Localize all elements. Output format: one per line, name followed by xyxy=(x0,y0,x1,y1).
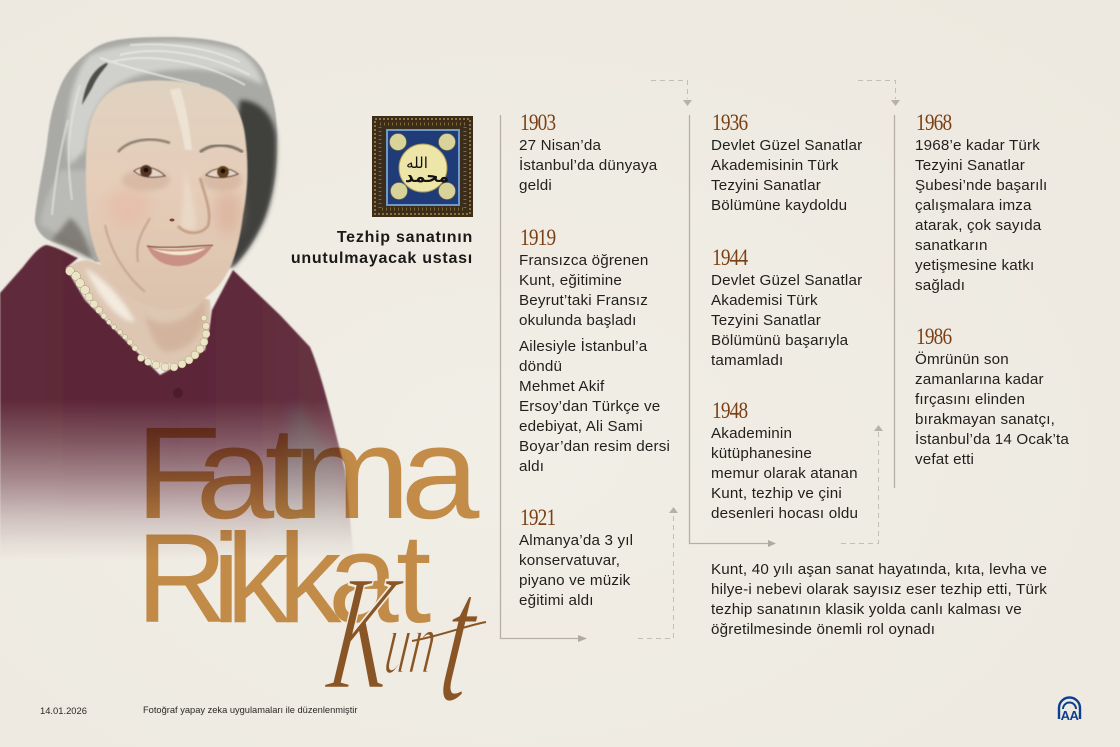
title: Kunt script: n xyxy=(404,593,443,693)
button xyxy=(173,388,183,398)
timeline 1921: 1921 xyxy=(520,505,555,530)
timeline 1944: Akademisi Türk xyxy=(711,292,818,309)
timeline 1986: fırçasını elinden xyxy=(915,391,1025,408)
timeline 1948: Kunt, tezhip ve çini xyxy=(711,485,842,502)
timeline 1944: Devlet Güzel Sanatlar xyxy=(711,272,862,289)
timeline 1986: vefat etti xyxy=(915,451,974,468)
title: Fatma Rikkat xyxy=(135,400,480,649)
sweater xyxy=(0,245,355,570)
timeline 1948: kütüphanesine xyxy=(711,445,812,462)
timeline 1968: çalışmalara imza xyxy=(915,197,1032,214)
hair xyxy=(35,37,277,268)
timeline 1944: 1944 xyxy=(712,245,747,270)
timeline 1919: Mehmet Akif xyxy=(519,378,604,395)
timeline 1968: Tezyini Sanatlar xyxy=(915,157,1025,174)
footer note: Fotoğraf yapay zeka uygulamaları ile düzenlenmiştir xyxy=(143,705,357,715)
timeline 1919: Kunt, eğitimine xyxy=(519,272,622,289)
calligraphy artwork: الله xyxy=(406,154,428,172)
eyebrows xyxy=(118,140,170,152)
timeline 1986: bırakmayan sanatçı, xyxy=(915,411,1055,428)
summary paragraph: tezhip sanatının klasik yolda canlı kalması ve xyxy=(711,601,1022,618)
calligraphy artwork: محمد xyxy=(405,167,449,187)
timeline 1919: edebiyat, Ali Sami xyxy=(519,418,643,435)
timeline 1921 xyxy=(519,505,633,609)
timeline 1903: İstanbul’da dünyaya xyxy=(519,157,657,174)
timeline 1936: Akademisinin Türk xyxy=(711,157,839,174)
timeline 1919: Fransızca öğrenen xyxy=(519,252,649,269)
timeline 1968: 1968’e kadar Türk xyxy=(915,137,1040,154)
timeline 1921: eğitimi aldı xyxy=(519,592,594,609)
timeline 1919: 1919 xyxy=(520,225,555,250)
timeline 1944: tamamladı xyxy=(711,352,783,369)
title: Kunt script: u xyxy=(379,593,418,693)
timeline 1986: Ömrünün son xyxy=(915,351,1009,368)
timeline 1968: sanatkarın xyxy=(915,237,988,254)
timeline 1968 xyxy=(915,110,1047,294)
face xyxy=(86,81,247,309)
timeline 1936 xyxy=(711,110,862,214)
nose xyxy=(178,178,209,233)
timeline 1919: Ailesiyle İstanbul’a xyxy=(519,338,647,355)
timeline 1986: İstanbul’da 14 Ocak’ta xyxy=(915,431,1069,448)
timeline 1986: zamanlarına kadar xyxy=(915,371,1044,388)
neck xyxy=(67,260,211,364)
summary paragraph: öğretilmesinde önemli rol oynadı xyxy=(711,621,935,638)
timeline 1944 xyxy=(711,245,862,369)
footer date: 14.01.2026 xyxy=(40,705,87,716)
timeline 1986 xyxy=(915,324,1069,468)
timeline 1968: 1968 xyxy=(916,110,951,135)
timeline 1936: Tezyini Sanatlar xyxy=(711,177,821,194)
timeline 1919: Ersoy’dan Türkçe ve xyxy=(519,398,660,415)
timeline 1968: yetişmesine katkı xyxy=(915,257,1034,274)
pearl necklace xyxy=(66,266,210,371)
timeline 1944: Bölümünü başarıyla xyxy=(711,332,848,349)
summary paragraph xyxy=(711,561,1047,638)
timeline 1903: geldi xyxy=(519,177,552,194)
title: Fatma Rikkat: Rikkat xyxy=(136,507,431,649)
timeline 1921: konservatuvar, xyxy=(519,552,620,569)
timeline 1936: Devlet Güzel Sanatlar xyxy=(711,137,862,154)
timeline 1903: 27 Nisan’da xyxy=(519,137,601,154)
title: Fatma Rikkat: Fatma xyxy=(135,400,480,546)
timeline 1948 xyxy=(711,398,858,522)
title: Kunt script xyxy=(318,535,490,720)
timeline 1948: Akademinin xyxy=(711,425,792,442)
calligraphy artwork xyxy=(372,116,473,217)
eyes xyxy=(134,165,238,178)
timeline 1919: döndü xyxy=(519,358,562,375)
timeline 1944: Tezyini Sanatlar xyxy=(711,312,821,329)
timeline 1919: Beyrut’taki Fransız xyxy=(519,292,648,309)
timeline 1919 xyxy=(519,225,670,475)
timeline 1919: aldı xyxy=(519,458,544,475)
timeline 1948: memur olarak atanan xyxy=(711,465,858,482)
portrait: Fatma Rikkat Kunt xyxy=(0,36,352,552)
timeline 1968: atarak, çok sayıda xyxy=(915,217,1041,234)
logo: AA xyxy=(1058,696,1082,722)
tagline: Tezhip sanatının xyxy=(337,229,473,246)
summary paragraph: hilye-i nebevi olarak sayısız eser tezhip etti, Türk xyxy=(711,581,1047,598)
timeline 1903: 1903 xyxy=(520,110,555,135)
summary paragraph: Kunt, 40 yılı aşan sanat hayatında, kıta, levha ve xyxy=(711,561,1047,578)
tagline xyxy=(291,229,473,267)
timeline 1903 xyxy=(519,110,658,194)
timeline 1948: desenleri hocası oldu xyxy=(711,505,858,522)
timeline 1919: okulunda başladı xyxy=(519,312,637,329)
timeline 1986: 1986 xyxy=(916,324,951,349)
mouth xyxy=(147,245,213,266)
timeline 1948: 1948 xyxy=(712,398,747,423)
timeline 1936: Bölümüne kaydoldu xyxy=(711,197,847,214)
timeline 1921: piyano ve müzik xyxy=(519,572,630,589)
tagline: unutulmayacak ustası xyxy=(291,250,473,267)
title: Kunt script: K xyxy=(318,542,411,720)
timeline 1936: 1936 xyxy=(712,110,747,135)
timeline 1921: Almanya’da 3 yıl xyxy=(519,532,633,549)
timeline 1919: Boyar’dan resim dersi xyxy=(519,438,670,455)
timeline 1968: Şubesi’nde başarılı xyxy=(915,177,1047,194)
timeline 1968: sağladı xyxy=(915,277,965,294)
